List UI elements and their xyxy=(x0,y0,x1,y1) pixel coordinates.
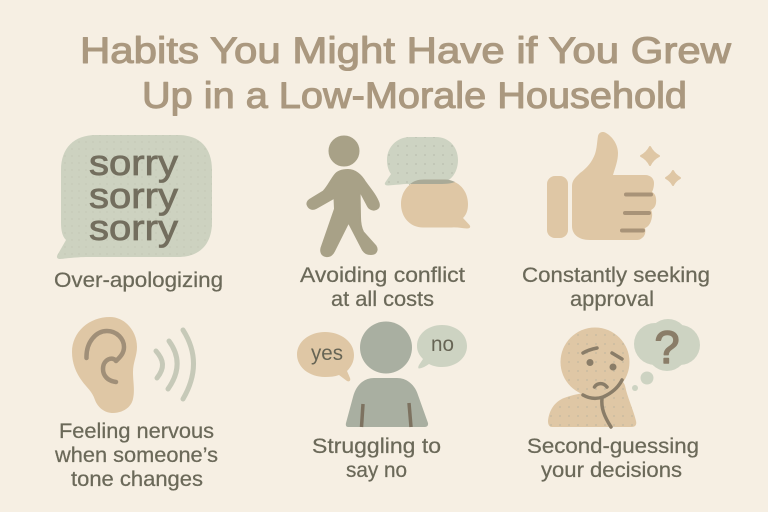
label: Struggling to xyxy=(312,434,441,458)
title xyxy=(80,29,732,116)
icon: yes bubble xyxy=(297,332,354,381)
icon: person xyxy=(346,322,428,427)
icon: speech bubble with sorry xyxy=(57,135,212,259)
label xyxy=(527,434,699,482)
label: your decisions xyxy=(541,458,682,482)
label: Second-guessing xyxy=(527,434,699,458)
icon: no bubble: no xyxy=(431,333,454,356)
label xyxy=(54,419,218,491)
icon: overlapping speech bubbles xyxy=(385,137,470,228)
title: Up in a Low-Morale Household xyxy=(142,74,687,116)
label xyxy=(300,263,465,311)
icon: no bubble xyxy=(417,325,467,368)
icon: thought cloud with question mark xyxy=(632,319,700,391)
label: when someone’s xyxy=(54,443,218,467)
panel: seeking approval xyxy=(522,132,710,311)
icon: speech bubble with sorry: sorry xyxy=(89,175,178,216)
icon: worried person xyxy=(548,328,636,427)
label: Constantly seeking xyxy=(522,263,710,287)
label: Over-apologizing xyxy=(54,268,223,292)
label: Avoiding conflict xyxy=(300,263,465,287)
label xyxy=(312,434,441,482)
panel: struggling to say no xyxy=(297,322,467,482)
icon: walking person xyxy=(307,136,379,256)
panel: avoiding conflict xyxy=(300,136,470,311)
icon: thumbs up xyxy=(547,132,656,240)
label xyxy=(522,263,710,311)
icon: sparkles xyxy=(641,147,680,185)
label: Feeling nervous xyxy=(59,419,214,443)
title: Habits You Might Have if You Grew xyxy=(80,29,732,71)
label: at all costs xyxy=(331,287,434,311)
label: tone changes xyxy=(71,467,203,491)
panel: over-apologizing xyxy=(54,135,223,292)
icon: thought cloud with question mark: ? xyxy=(654,322,680,373)
icon: speech bubble with sorry: sorry xyxy=(89,142,178,183)
panel: nervous about tone xyxy=(54,317,218,491)
icon: sound waves xyxy=(156,330,194,399)
icon: ear xyxy=(72,317,137,413)
label: approval xyxy=(570,287,654,311)
panel: second-guessing xyxy=(527,319,700,482)
icon: speech bubble with sorry: sorry xyxy=(89,207,178,248)
icon: yes bubble: yes xyxy=(311,342,343,365)
label: say no xyxy=(346,458,407,482)
person's arm lines xyxy=(362,403,411,427)
